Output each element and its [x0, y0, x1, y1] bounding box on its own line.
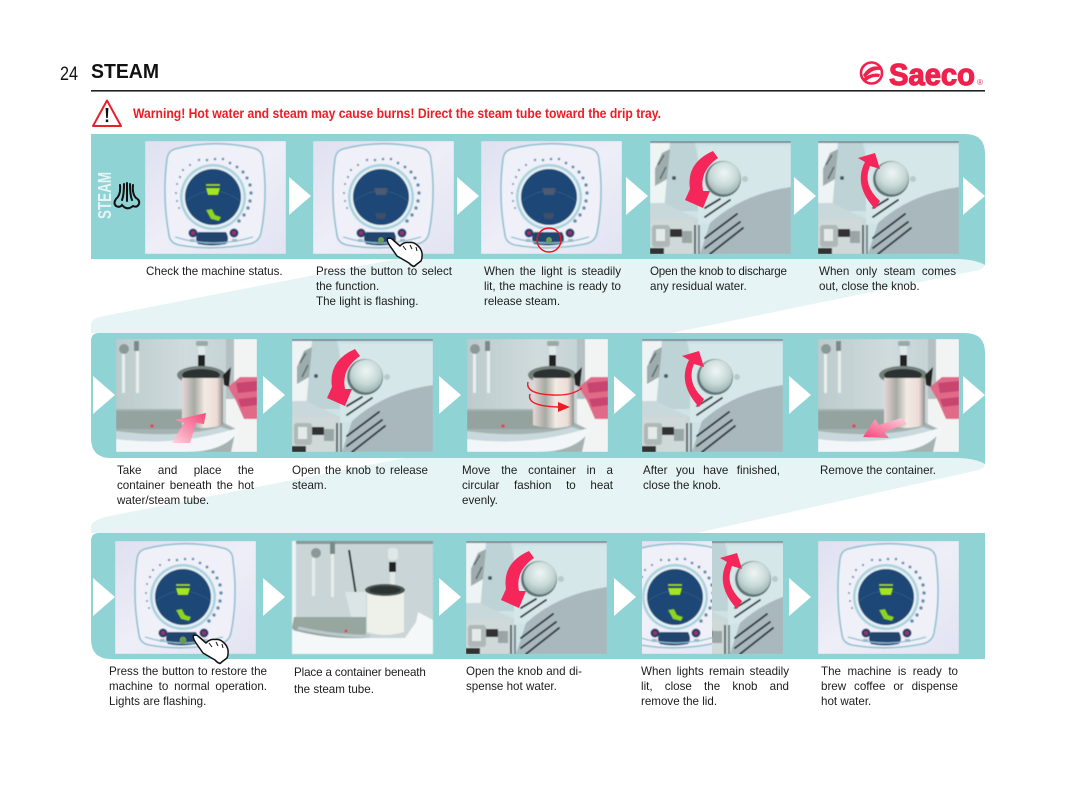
- icon: warning triangle: [93, 100, 121, 126]
- arrow: [263, 376, 285, 414]
- title: STEAM: [91, 61, 159, 83]
- caption: machine ready: The machine is ready to: [821, 665, 958, 678]
- photo: knob open: [292, 339, 433, 452]
- caption: remove lid: When lights remain steadily: [641, 665, 789, 678]
- caption: light steady: release steam.: [484, 295, 560, 308]
- logo: Saeco: Saeco: [889, 57, 975, 92]
- arrow: [457, 177, 479, 215]
- photo: dial and knob split: [642, 541, 783, 654]
- photo: container under tube: [292, 541, 433, 654]
- caption: circular motion: evenly.: [462, 494, 498, 507]
- icon: hand on button: [387, 238, 422, 266]
- caption: press the button: [316, 265, 452, 308]
- arrow: [439, 578, 461, 616]
- caption: remove container: Remove the container.: [820, 464, 936, 477]
- caption: discharge: any residual water.: [650, 280, 747, 293]
- caption: light steady: lit, the machine is ready to: [484, 280, 621, 293]
- arrow: [963, 376, 985, 414]
- caption: take and place: water/steam tube.: [117, 494, 209, 507]
- panel: row 2: [91, 333, 985, 464]
- bottom light wedge of band 2: [91, 458, 985, 533]
- arrow: [789, 376, 811, 414]
- caption: light steady: [484, 265, 621, 308]
- caption: dispense hot water: Open the knob and di-: [466, 665, 582, 678]
- bottom light wedge of band 1: [91, 259, 985, 333]
- caption: restore operation: [109, 665, 267, 708]
- photo: dial ready: [818, 541, 959, 654]
- caption: close the knob: When only steam comes: [819, 265, 956, 278]
- caption: take and place: [117, 464, 254, 507]
- caption: place container: [294, 666, 426, 696]
- photo: dial, pressing button: [313, 141, 454, 254]
- header rule: [91, 90, 985, 92]
- photo: pot removed: [818, 339, 959, 452]
- caption: close the knob: out, close the knob.: [819, 280, 920, 293]
- arrow: [93, 376, 115, 414]
- caption: check status: Check the machine status.: [146, 265, 283, 278]
- caption: release steam: [292, 464, 428, 492]
- arrow: [963, 177, 985, 215]
- caption: discharge: [650, 265, 787, 293]
- arrow: [626, 177, 648, 215]
- caption: press the button: The light is flashing.: [316, 295, 418, 308]
- caption: machine ready: brew coffee or dispense: [821, 680, 958, 693]
- arrow: [289, 177, 311, 215]
- arrow: [614, 376, 636, 414]
- photo: dial, restore button: [115, 541, 256, 654]
- caption: place container: Place a container beneath: [294, 666, 426, 679]
- caption: restore operation: machine to normal operation.: [109, 680, 267, 693]
- caption: after finished: [643, 464, 780, 492]
- caption: press the button: Press the button to select: [316, 265, 452, 278]
- caption: dispense hot water: spense hot water.: [466, 680, 557, 693]
- photo: knob open: [466, 541, 607, 654]
- caption: restore operation: Lights are flashing.: [109, 695, 206, 708]
- caption: release steam: Open the knob to release: [292, 464, 428, 477]
- arrow: [263, 578, 285, 616]
- photo: dial, red highlight circle: [481, 141, 622, 254]
- caption: release steam: steam.: [292, 479, 327, 492]
- arrow: [439, 376, 461, 414]
- caption: remove lid: remove the lid.: [641, 695, 717, 708]
- photo: pot circular movement: [467, 339, 608, 452]
- page number: 24: [60, 64, 78, 85]
- icon: steam: [114, 183, 139, 208]
- photo: knob close: [818, 141, 959, 254]
- side label: STEAM: STEAM: [95, 172, 115, 219]
- caption: remove lid: lit, close the knob and: [641, 680, 789, 693]
- caption: dispense hot water: [466, 665, 582, 693]
- caption: take and place: Take and place the: [117, 464, 254, 477]
- caption: place container: the steam tube.: [294, 683, 374, 696]
- caption: light steady: When the light is steadily: [484, 265, 621, 278]
- caption: machine ready: [821, 665, 958, 708]
- warning text: Warning! Hot water and steam may cause burns! Direct the steam tube toward the drip tray.: [133, 106, 661, 121]
- caption: restore operation: Press the button to restore the: [109, 665, 267, 678]
- arrow: [614, 578, 636, 616]
- icon: hand on restore button: [193, 635, 228, 664]
- caption: machine ready: hot water.: [821, 695, 871, 708]
- photo: pot placed: [116, 339, 257, 452]
- panel: row 3: [91, 533, 985, 659]
- arrow: [93, 578, 115, 616]
- caption: circular motion: Move the container in a: [462, 464, 613, 477]
- caption: circular motion: circular fashion to heat: [462, 479, 613, 492]
- caption: remove lid: [641, 665, 789, 708]
- photo: knob open: [650, 141, 791, 254]
- logo: Saeco: ®: [977, 78, 983, 87]
- arrow: [794, 177, 816, 215]
- caption: circular motion: [462, 464, 613, 507]
- arrow: [789, 578, 811, 616]
- caption: discharge: Open the knob to discharge: [650, 265, 787, 278]
- caption: after finished: After you have finished,: [643, 464, 780, 477]
- caption: take and place: container beneath the hot: [117, 479, 254, 492]
- caption: press the button: the function.: [316, 280, 379, 293]
- caption: after finished: close the knob.: [643, 479, 721, 492]
- photo: knob close: [642, 339, 783, 452]
- panel: row 1: [91, 134, 985, 265]
- caption: close the knob: [819, 265, 956, 293]
- photo: dial, lights on: [145, 141, 286, 254]
